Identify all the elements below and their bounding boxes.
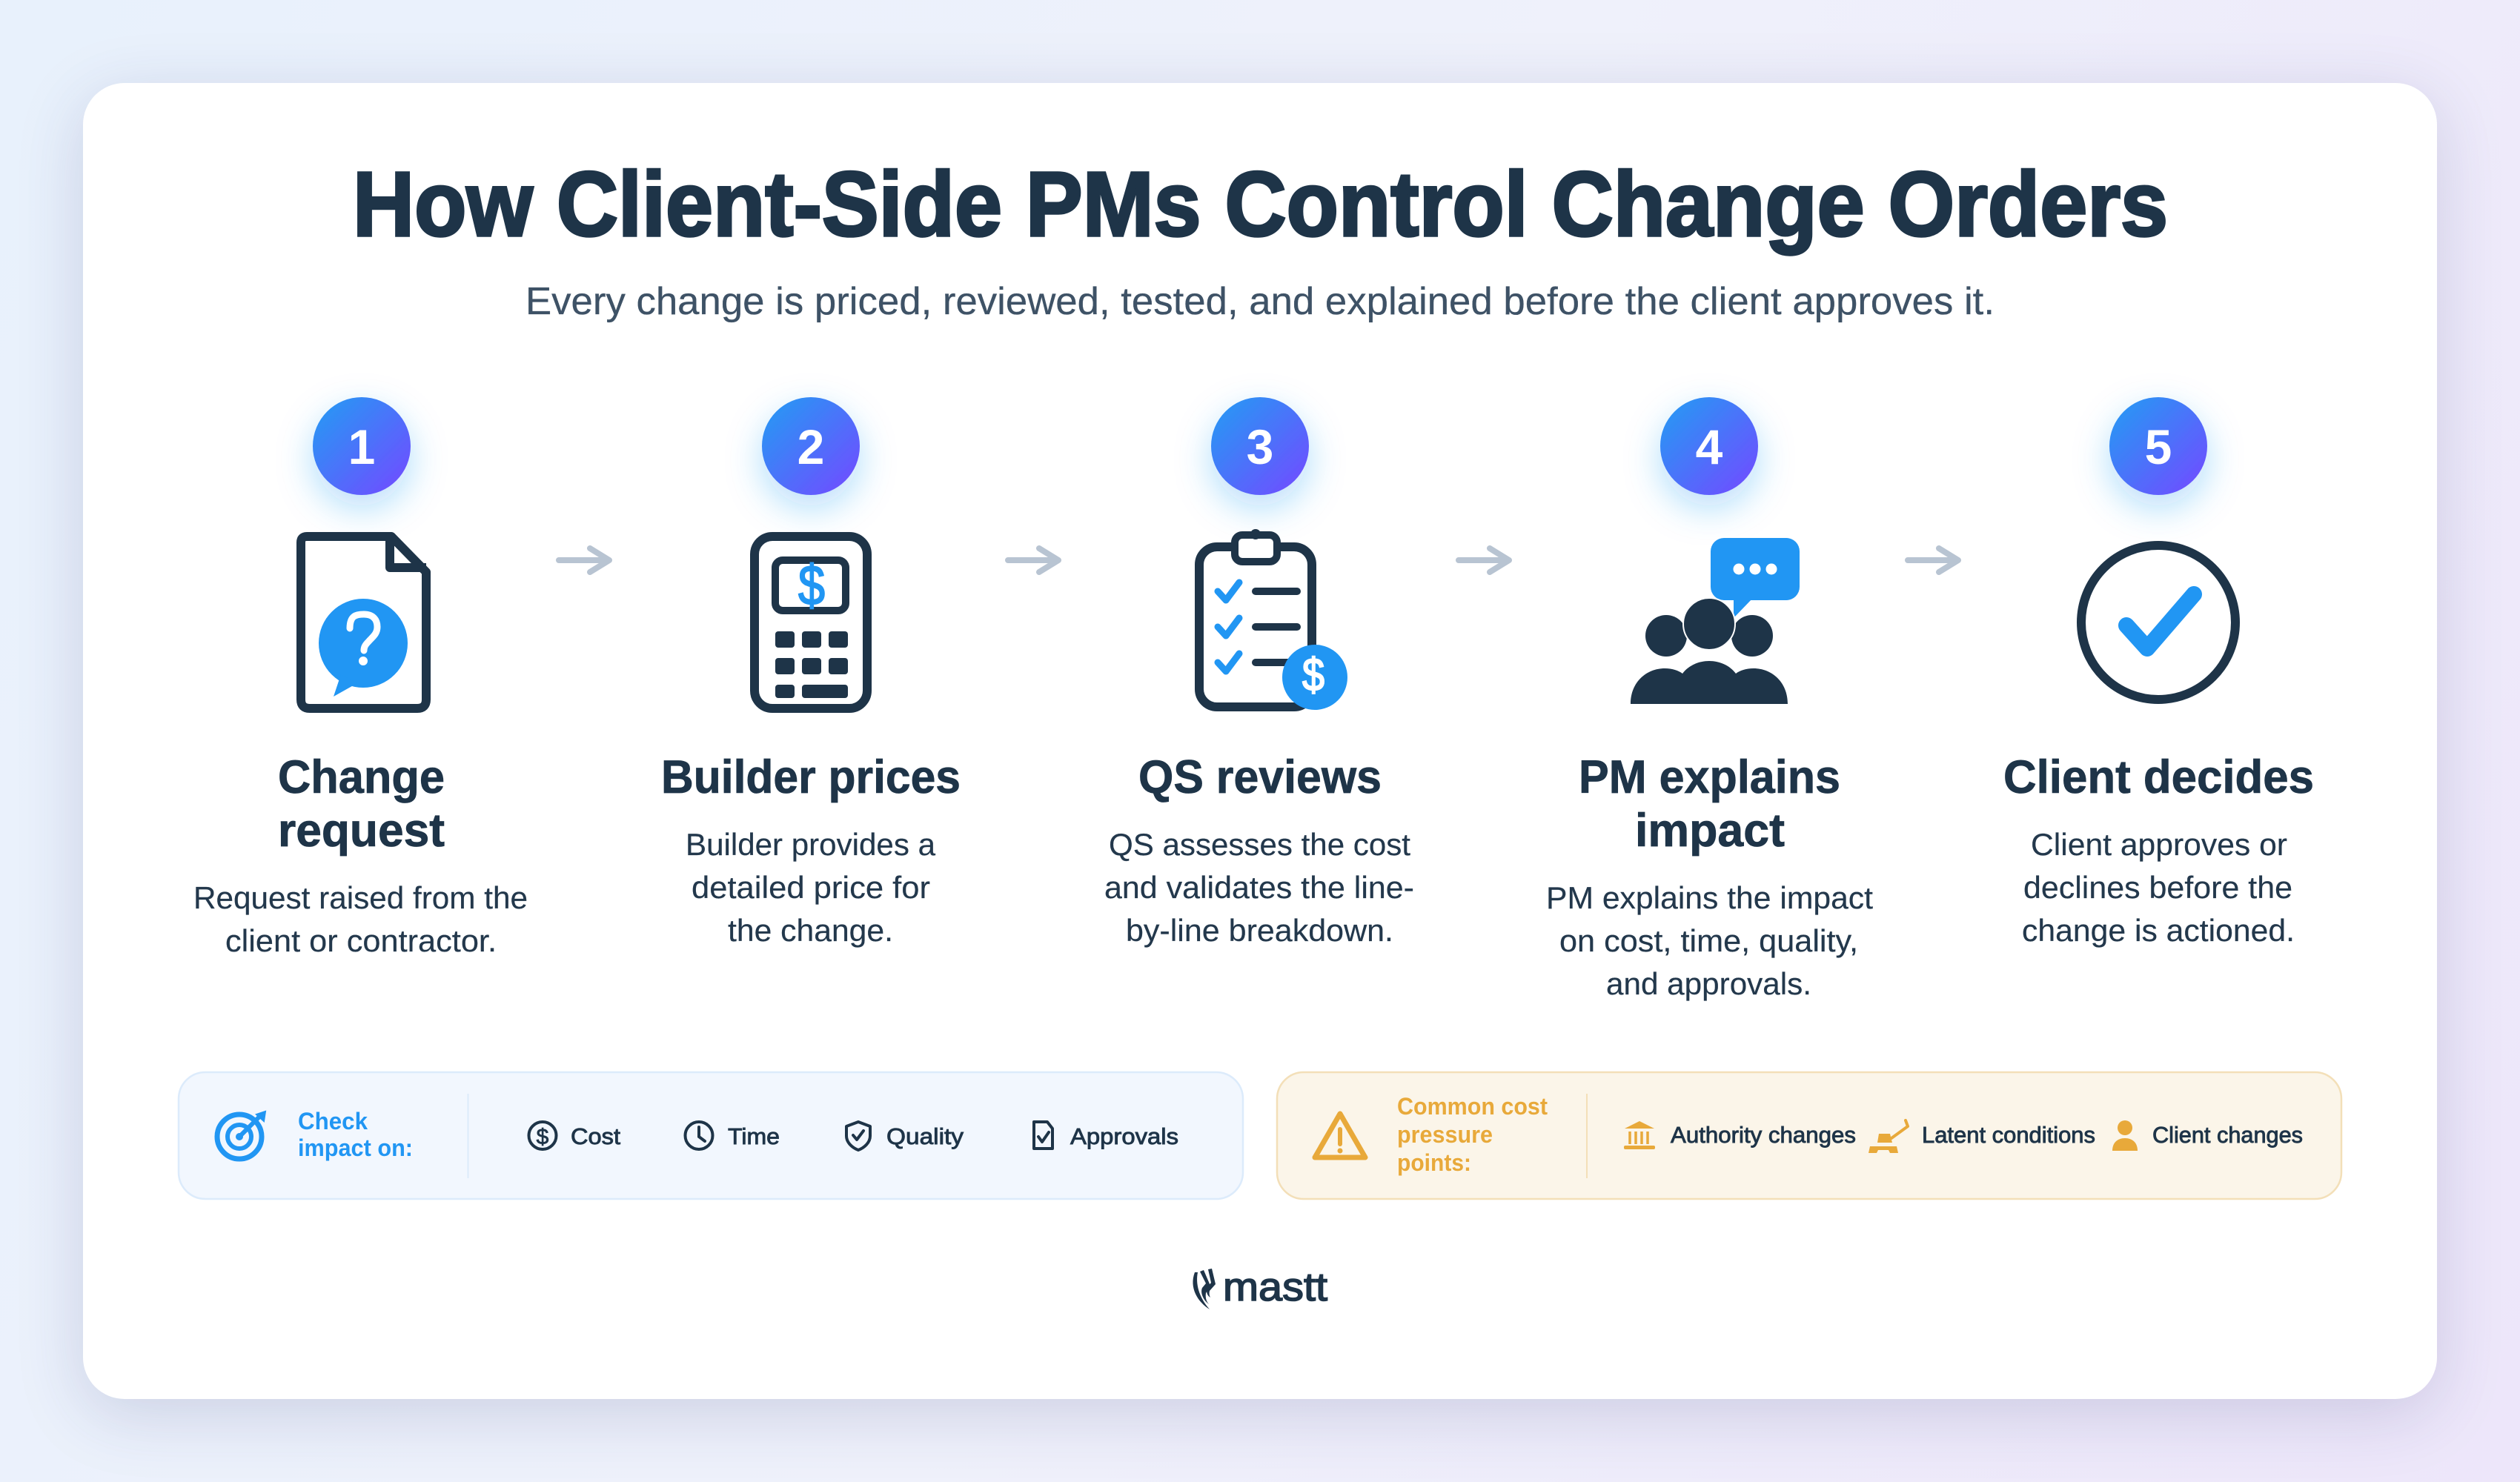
heading: Builder prices [661,751,961,803]
description: the change. [728,913,893,948]
panel: check impact on [179,1072,1243,1199]
item: approvals: Approvals [1070,1123,1178,1149]
item: client changes: Client changes [2152,1122,2303,1148]
label: common cost pressure points: pressure [1397,1121,1493,1148]
heading: Change [278,751,445,803]
item: cost [529,1122,620,1149]
label: check impact on: impact on: [298,1134,413,1161]
step 1: change request [193,397,528,958]
label: check impact on: Check [298,1108,368,1134]
badge 2: 2 [798,419,824,474]
description: and validates the line- [1104,870,1414,905]
badge 1: 1 [348,419,375,474]
badge 4 [1660,397,1758,495]
description: and approvals. [1606,966,1811,1001]
description: by-line breakdown. [1126,913,1393,948]
description [193,880,528,958]
description: PM explains the impact [1546,880,1873,915]
description: client or contractor. [225,923,497,958]
item: authority changes: Authority changes [1671,1122,1856,1148]
description: Client approves or [2031,827,2287,862]
description: QS assesses the cost [1109,827,1410,862]
step 2: builder prices [661,397,961,948]
description: Builder provides a [686,827,936,862]
arrow 3 to 4 [1459,548,1509,572]
description: change is actioned. [2022,913,2295,948]
description [1104,827,1414,948]
description: detailed price for [692,870,930,905]
item: time [685,1122,780,1149]
icon: warning triangle [1315,1114,1365,1157]
item: latent conditions: Latent conditions [1922,1122,2095,1148]
badge 5: 5 [2145,419,2172,474]
icon: calculator: $ [798,554,825,617]
icon: clipboard with checks and dollar coin: $ [1302,650,1324,701]
icon: clipboard with checks and dollar coin [1199,529,1347,710]
label: common cost pressure points: points: [1397,1149,1471,1176]
step 3: QS reviews [1104,397,1414,948]
panel: common cost pressure points [1277,1072,2341,1199]
icon: target [217,1112,265,1159]
badge 4: 4 [1696,419,1723,474]
subtitle: Every change is priced, reviewed, tested, and explained before the client approves it. [525,280,1995,323]
heading: impact [1635,805,1785,857]
icon: people with speech bubble [1631,538,1800,704]
arrow 4 to 5 [1908,548,1958,572]
item: latent conditions [1869,1120,2095,1153]
icon: calculator [755,536,867,708]
label: common cost pressure points [1397,1093,1548,1176]
description [2022,827,2295,948]
item: cost: $ [537,1125,549,1149]
title: How Client-Side PMs Control Change Orders [353,154,2168,256]
heading [278,751,445,857]
logo: mastt: mastt [1223,1265,1327,1309]
badge 3 [1211,397,1309,495]
heading: PM explains [1579,751,1840,803]
item: client changes [2112,1120,2303,1151]
description: on cost, time, quality, [1559,923,1858,958]
step 5: client decides [2003,397,2314,948]
item: time: Time [728,1123,780,1149]
badge 3: 3 [1247,419,1273,474]
description [1546,880,1873,1001]
heading: QS reviews [1138,751,1382,803]
arrow 1 to 2 [559,548,609,572]
badge 1 [313,397,411,495]
icon: document with question [301,536,426,708]
item: approvals [1034,1122,1178,1149]
description: Request raised from the [193,880,528,915]
item: cost: Cost [571,1123,620,1149]
description: declines before the [2023,870,2292,905]
step 4: PM explains impact [1546,397,1873,1001]
item: quality: Quality [886,1123,964,1149]
label: check impact on [298,1108,413,1161]
item: quality [846,1122,964,1150]
badge 2 [762,397,860,495]
icon: circled check [2081,545,2235,700]
heading: request [278,805,445,857]
description [686,827,936,948]
label: common cost pressure points: Common cost [1397,1093,1548,1120]
heading: Client decides [2003,751,2314,803]
badge 5 [2109,397,2207,495]
arrow 2 to 3 [1008,548,1058,572]
heading [1579,751,1840,857]
